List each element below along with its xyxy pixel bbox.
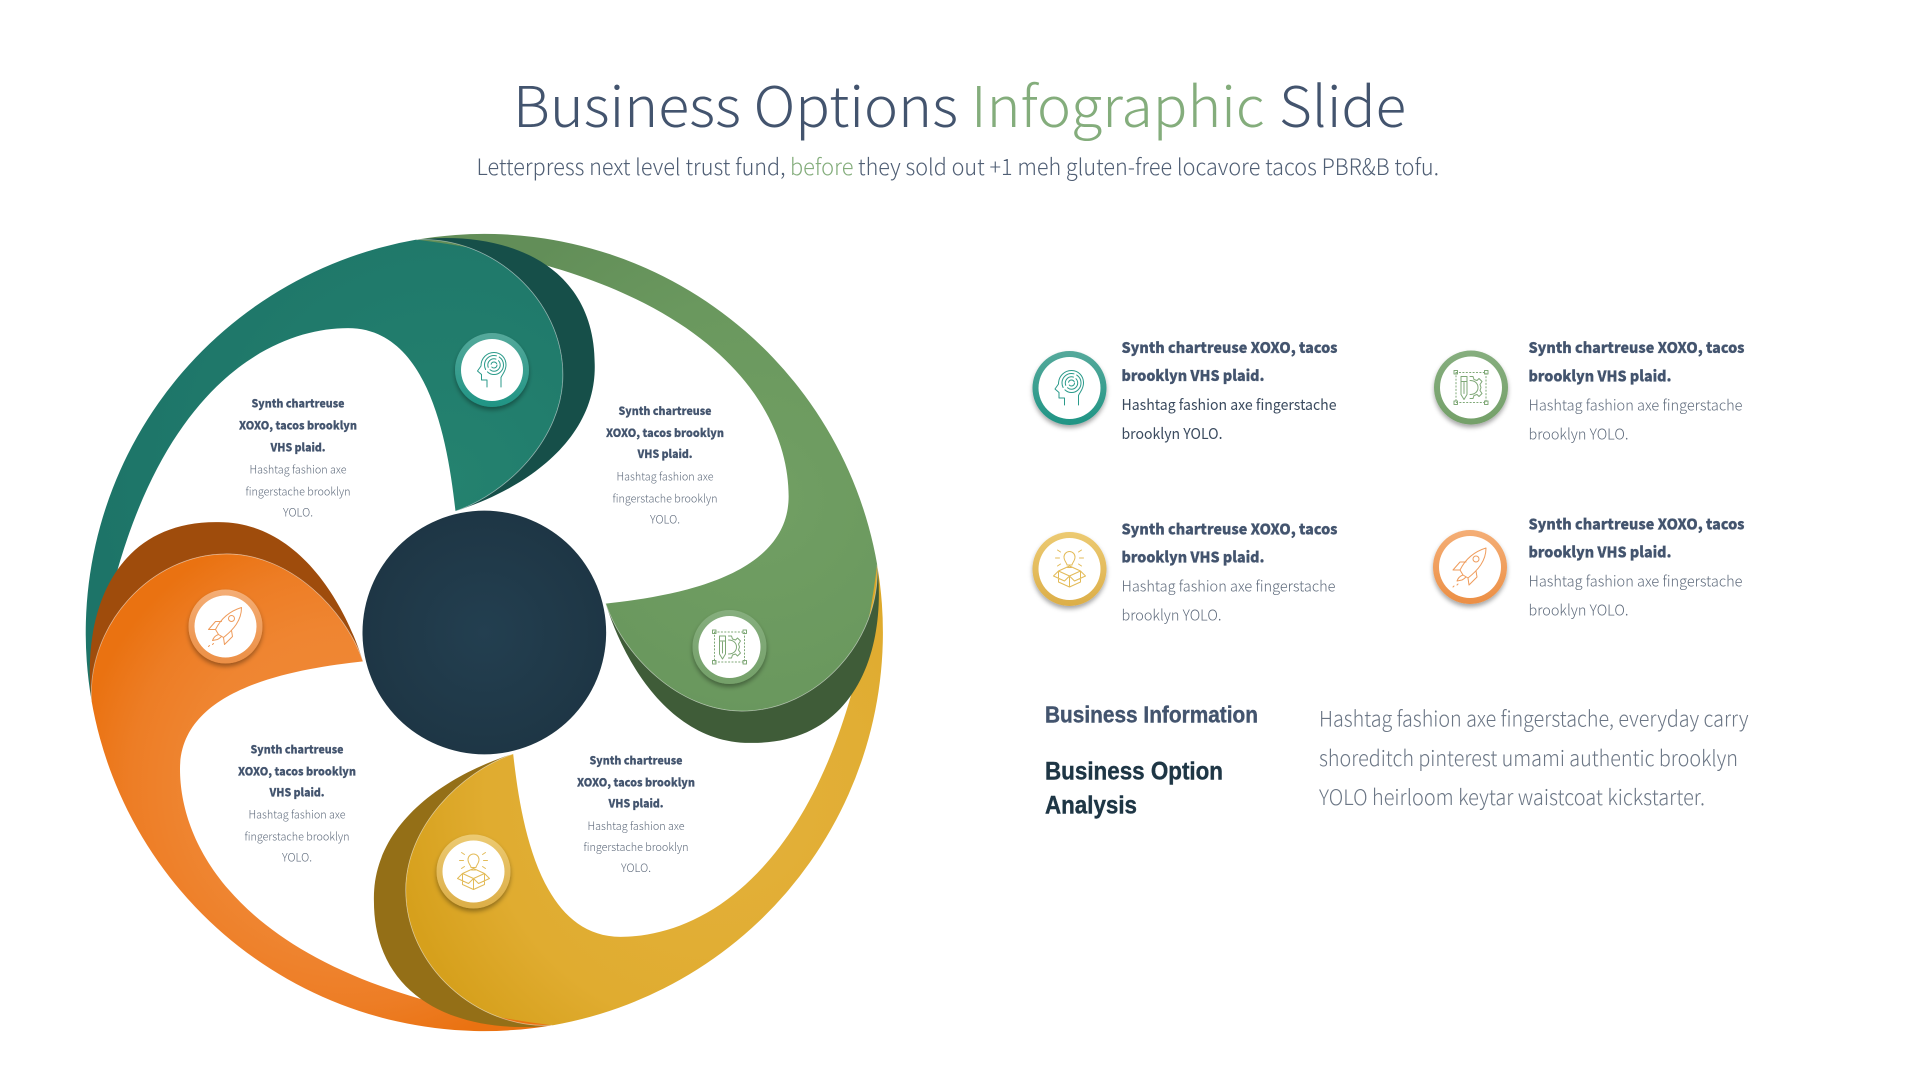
text block: teal blade: XOXO, tacos brooklyn [239,418,357,434]
subtitle: Letterpress next level trust fund, [476,150,786,182]
legend item: gold [1032,518,1338,626]
text block: gold blade: YOLO. [621,860,651,876]
icon: green badge gear [692,610,766,684]
legend text: orange [1528,514,1745,620]
subtitle: before [790,150,854,182]
teal blade shadow fold [416,238,595,511]
text block: teal blade [239,396,357,520]
legend text: teal: Synth chartreuse XOXO, tacos [1122,337,1338,358]
legend text: gold: brooklyn YOLO. [1122,604,1222,626]
text block: green blade: Synth chartreuse [618,403,712,419]
legend text: teal: brooklyn YOLO. [1122,423,1222,444]
text block: orange blade [238,742,356,866]
text block: orange blade: Hashtag fashion axe [248,806,346,822]
icon: head [1032,351,1106,425]
legend text: orange: brooklyn YOLO. [1528,600,1628,620]
text block: green blade: Hashtag fashion axe [616,468,714,484]
heading: business option analysis [1045,758,1223,820]
subtitle [476,150,1439,182]
heading: business option analysis: Business Option [1045,758,1223,786]
icon: orange badge rocket [188,590,262,664]
text block: teal blade: Synth chartreuse [252,396,345,412]
legend text: green [1528,337,1745,444]
legend text: gold: Synth chartreuse XOXO, tacos [1122,518,1338,540]
icon: box [1032,532,1106,606]
text block: green blade [606,403,724,528]
pinwheel blades [86,234,883,1031]
icon: rocket [1433,530,1507,604]
text block: orange blade: XOXO, tacos brooklyn [238,764,356,780]
paragraph: Hashtag fashion axe fingerstache, everyday carry [1319,702,1749,734]
gold blade shadow fold [374,754,552,1027]
legend text: teal [1122,337,1338,444]
text block: green blade: VHS plaid. [637,446,693,462]
legend text: gold [1122,518,1338,626]
title: Infographic [971,63,1264,144]
legend item: orange [1433,514,1745,620]
legend text: green: brooklyn VHS plaid. [1528,366,1672,386]
text block: orange blade: VHS plaid. [269,784,325,800]
icon: gear [1434,350,1508,424]
legend text: teal: brooklyn VHS plaid. [1122,365,1264,386]
legend text: green: Synth chartreuse XOXO, tacos [1528,337,1745,358]
orange blade shadow fold [90,522,363,701]
icon: teal badge head [455,333,529,407]
text block: gold blade: fingerstache brooklyn [584,839,688,855]
text block: teal blade: fingerstache brooklyn [246,484,350,500]
panel: gold blade [406,565,883,1026]
legend text: teal: Hashtag fashion axe fingerstache [1122,394,1336,415]
icon: gold badge box [436,834,510,908]
legend text: gold: brooklyn VHS plaid. [1122,546,1264,568]
panel: teal blade [86,239,563,700]
text block: gold blade: VHS plaid. [608,796,664,812]
legend text: orange: Synth chartreuse XOXO, tacos [1528,514,1745,534]
pinwheel diagram [86,234,883,1031]
text block: gold blade: XOXO, tacos brooklyn [577,774,695,790]
legend text: green: Hashtag fashion axe fingerstache [1528,394,1742,416]
text block: green blade: XOXO, tacos brooklyn [606,425,724,441]
legend text: orange: Hashtag fashion axe fingerstache [1528,570,1742,592]
legend text: orange: brooklyn VHS plaid. [1528,542,1672,562]
title: Business Options [513,63,958,144]
center circle [362,511,606,754]
paragraph: YOLO heirloom keytar waistcoat kickstarter. [1319,781,1705,812]
text block: green blade: YOLO. [650,512,680,528]
paragraph: shoreditch pinterest umami authentic brooklyn [1319,742,1738,773]
text block: green blade: fingerstache brooklyn [612,490,718,506]
text block: orange blade: Synth chartreuse [250,742,344,758]
subtitle: they sold out +1 meh gluten-free locavore tacos PBR&B tofu. [858,150,1439,182]
title [513,63,1406,144]
text block: gold blade: Synth chartreuse [590,752,683,768]
panel: green blade [417,234,877,711]
text block: gold blade: Hashtag fashion axe [588,818,684,834]
title: Slide [1279,63,1406,144]
text block: orange blade: fingerstache brooklyn [244,828,350,844]
heading: business option analysis: Analysis [1045,792,1137,820]
text block: teal blade: YOLO. [283,504,313,520]
panel: orange blade [91,554,552,1031]
paragraph [1319,702,1749,812]
heading: business information: Business Information [1045,702,1258,728]
legend item: green [1434,337,1745,444]
green blade shadow fold [606,564,879,743]
text block: gold blade [577,752,695,876]
text block: orange blade: YOLO. [282,850,312,866]
legend text: gold: Hashtag fashion axe fingerstache [1122,576,1336,596]
legend item: teal [1032,337,1338,444]
text block: teal blade: VHS plaid. [270,440,326,456]
text block: teal blade: Hashtag fashion axe [250,462,346,478]
legend text: green: brooklyn YOLO. [1528,424,1628,444]
